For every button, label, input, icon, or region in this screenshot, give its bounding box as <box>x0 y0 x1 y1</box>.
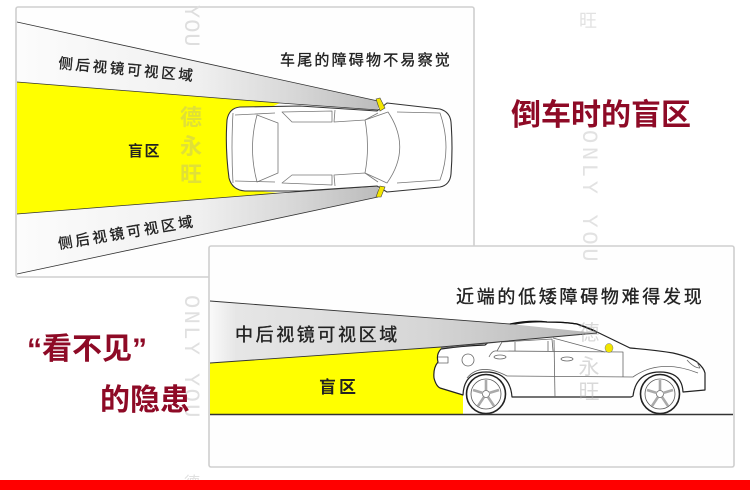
watermark: brand, second panel <box>578 322 600 404</box>
yellow blind zone, top view <box>17 82 280 214</box>
car, top view <box>226 103 452 192</box>
heading: hidden danger: 的隐患 <box>100 384 190 417</box>
watermark: vertical right column: 旺 <box>579 11 597 31</box>
label: rear obstacles hard to detect: 车尾的障碍物不易察觉 <box>280 51 452 69</box>
panel: side view blind spot diagram <box>209 246 734 467</box>
car, side view <box>434 322 705 414</box>
yellow rear-view mirror <box>605 344 613 352</box>
watermark: vertical left column <box>178 295 203 490</box>
watermark: brand, second panel: 德 <box>578 322 600 345</box>
upper side mirror view beam <box>17 22 378 110</box>
center mirror view beam <box>210 301 597 363</box>
roof line over beam <box>510 321 597 332</box>
watermark: brand, first panel <box>180 105 202 187</box>
watermark: you, top: YOU <box>178 5 203 48</box>
watermark: brand, first panel: 德 <box>180 105 202 130</box>
rear wheel <box>466 374 506 414</box>
lower side mirror view beam <box>17 186 378 274</box>
label: blind zone: 盲区 <box>128 142 161 160</box>
watermark: brand, second panel: 旺 <box>578 381 600 404</box>
watermark: vertical left column: ONLY YOU <box>178 295 203 420</box>
heading: blind spots when reversing: 倒车时的盲区 <box>511 99 691 132</box>
yellow blind zone, side view <box>210 347 463 414</box>
watermark: brand, first panel: 旺 <box>180 162 202 187</box>
red footer bar <box>0 480 750 490</box>
label: lower mirror view: 侧后视镜可视区域 <box>57 212 197 253</box>
panel: top-down blind spot diagram <box>16 5 474 277</box>
front wheel <box>640 374 680 414</box>
heading: unseen: “看不见” <box>27 333 147 366</box>
label: center mirror view: 中后视镜可视区域 <box>235 325 400 345</box>
yellow side mirrors <box>376 98 385 197</box>
watermark: vertical right column: ONLY YOU <box>576 130 601 265</box>
watermark: brand, second panel: 永 <box>578 356 600 379</box>
ground line <box>210 414 733 416</box>
watermark: vertical right column <box>576 11 601 265</box>
watermark: brand, first panel: 永 <box>180 134 202 159</box>
label: blind zone: 盲区 <box>319 377 359 397</box>
label: upper mirror view: 侧后视镜可视区域 <box>58 54 196 85</box>
label: near low obstacles hard to detect: 近端的低矮障碍物难得发现 <box>456 287 704 307</box>
